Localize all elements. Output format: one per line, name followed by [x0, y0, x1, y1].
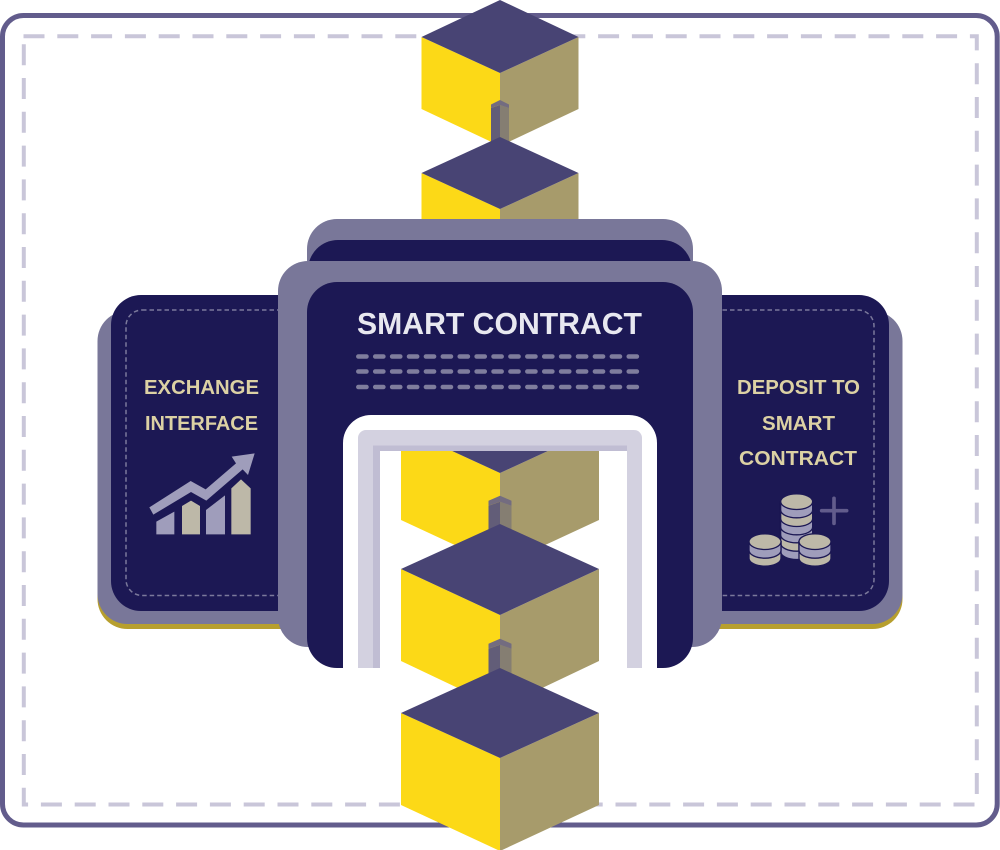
- label: exchange interface: EXCHANGE: [144, 376, 259, 399]
- rear contract card: [307, 219, 693, 340]
- label: deposit to smart contract: [737, 376, 860, 470]
- panel: exchange interface: [98, 295, 411, 629]
- block 2: [422, 137, 578, 219]
- label: deposit to smart contract: DEPOSIT TO: [737, 376, 860, 399]
- label: deposit to smart contract: CONTRACT: [739, 447, 857, 470]
- connector 3: [488, 639, 512, 690]
- blocks above the contract: [422, 0, 578, 219]
- block 1: [422, 0, 578, 146]
- dashed text lines: [358, 356, 637, 387]
- panel: deposit to smart contract: [589, 295, 902, 629]
- connector 2: [488, 496, 512, 545]
- block 4: [401, 524, 599, 708]
- block 5: [401, 668, 599, 850]
- icon: rising bar chart: [149, 453, 255, 534]
- block 3: [401, 451, 599, 545]
- doorway: [343, 415, 657, 668]
- connector 1: [491, 100, 509, 145]
- label: exchange interface: [144, 376, 259, 435]
- label: exchange interface: INTERFACE: [145, 412, 258, 435]
- blocks passing through the contract: [401, 451, 599, 850]
- icon: coin stacks with plus: [749, 494, 847, 566]
- heading: smart contract: SMART CONTRACT: [357, 306, 642, 341]
- panel: smart contract: [278, 261, 722, 668]
- label: deposit to smart contract: SMART: [762, 412, 835, 435]
